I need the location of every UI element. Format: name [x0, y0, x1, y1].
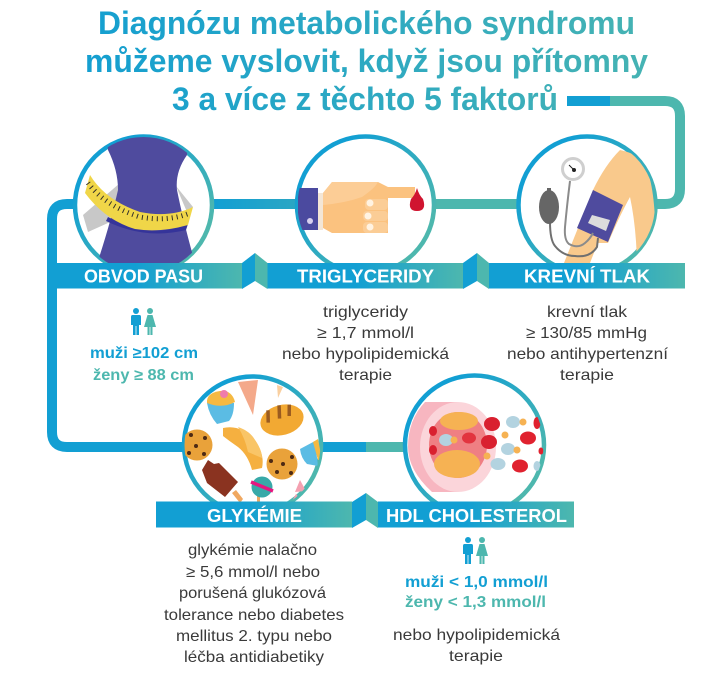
ribbon: triglyceridy: TRIGLYCERIDY [297, 266, 435, 286]
arrow: connector between glycemia and HDL [320, 442, 405, 452]
title: Diagnózu metabolického syndromu [98, 5, 635, 41]
text: HDL limits [405, 574, 548, 611]
panel: glycemia circle [182, 376, 322, 514]
text: blood pressure criteria: ≥ 130/85 mmHg [526, 325, 647, 342]
arrow: connector between triglycerides and waist [214, 199, 295, 209]
text: glycemia criteria: mellitus 2. typu nebo [176, 628, 332, 645]
panel: triglycerides circle [297, 136, 434, 274]
ribbon: HDL cholesterol [366, 493, 574, 528]
title [85, 5, 648, 117]
text: HDL therapy note [393, 627, 560, 665]
text: waist limits [90, 345, 198, 384]
panel: blood pressure circle [518, 136, 656, 274]
text: glycemia criteria: tolerance nebo diabetes [164, 607, 344, 624]
icon: man and woman (HDL) [463, 537, 488, 564]
text: glycemia criteria: ≥ 5,6 mmol/l nebo [186, 564, 320, 581]
ribbon: glykémie [156, 493, 366, 528]
icon: blood pressure cuff [539, 150, 655, 263]
icon: sweet foods [182, 380, 322, 505]
title: 3 a více z těchto 5 faktorů [172, 81, 558, 117]
arrow: connector between blood pressure and triglycerides [436, 199, 517, 209]
ribbon: glykémie: GLYKÉMIE [207, 505, 302, 526]
text: blood pressure criteria: krevní tlak [547, 304, 628, 321]
text: blood pressure criteria: terapie [560, 367, 614, 384]
ribbon: obvod pasu [47, 253, 255, 289]
text: triglycerides criteria: nebo hypolipidemická [282, 346, 449, 363]
arrow: connector from title to blood pressure circle [567, 101, 680, 204]
text: triglycerides criteria: ≥ 1,7 mmol/l [317, 325, 414, 342]
icon: man and woman (waist) [131, 308, 156, 335]
text: waist limits: muži ≥102 cm [90, 345, 198, 362]
ribbon: obvod pasu: OBVOD PASU [84, 266, 203, 286]
text: triglycerides criteria: triglyceridy [323, 304, 408, 321]
text: HDL limits: muži < 1,0 mmol/l [405, 574, 548, 591]
text: triglycerides criteria: terapie [339, 367, 392, 384]
text: HDL therapy note: nebo hypolipidemická [393, 627, 560, 644]
ribbon: HDL cholesterol: HDL CHOLESTEROL [386, 505, 567, 526]
text: blood pressure criteria [507, 304, 669, 384]
arrow: connector from waist to glycemia circle [52, 204, 190, 447]
text: glycemia criteria: léčba antidiabetiky [184, 649, 324, 666]
ribbon: krevní tlak [477, 253, 685, 289]
icon: hand with blood drop [298, 182, 424, 233]
panel: HDL circle [404, 376, 544, 514]
ribbon: triglyceridy [255, 253, 477, 289]
text: waist limits: ženy ≥ 88 cm [93, 367, 194, 384]
text: blood pressure criteria: nebo antihypertenzní [507, 346, 669, 363]
icon: waist with measuring tape [83, 137, 193, 263]
text: glycemia criteria: porušená glukózová [179, 585, 326, 602]
text: glycemia criteria: glykémie nalačno [188, 542, 317, 559]
icon: clogged artery [404, 402, 544, 492]
text: glycemia criteria [164, 542, 344, 666]
text: triglycerides criteria [282, 304, 449, 384]
text: HDL therapy note: terapie [449, 648, 503, 665]
ribbon: krevní tlak: KREVNÍ TLAK [524, 266, 651, 286]
title: můžeme vyslovit, když jsou přítomny [85, 43, 648, 79]
panel: waist circle [75, 130, 212, 274]
text: HDL limits: ženy < 1,3 mmol/l [405, 594, 546, 611]
